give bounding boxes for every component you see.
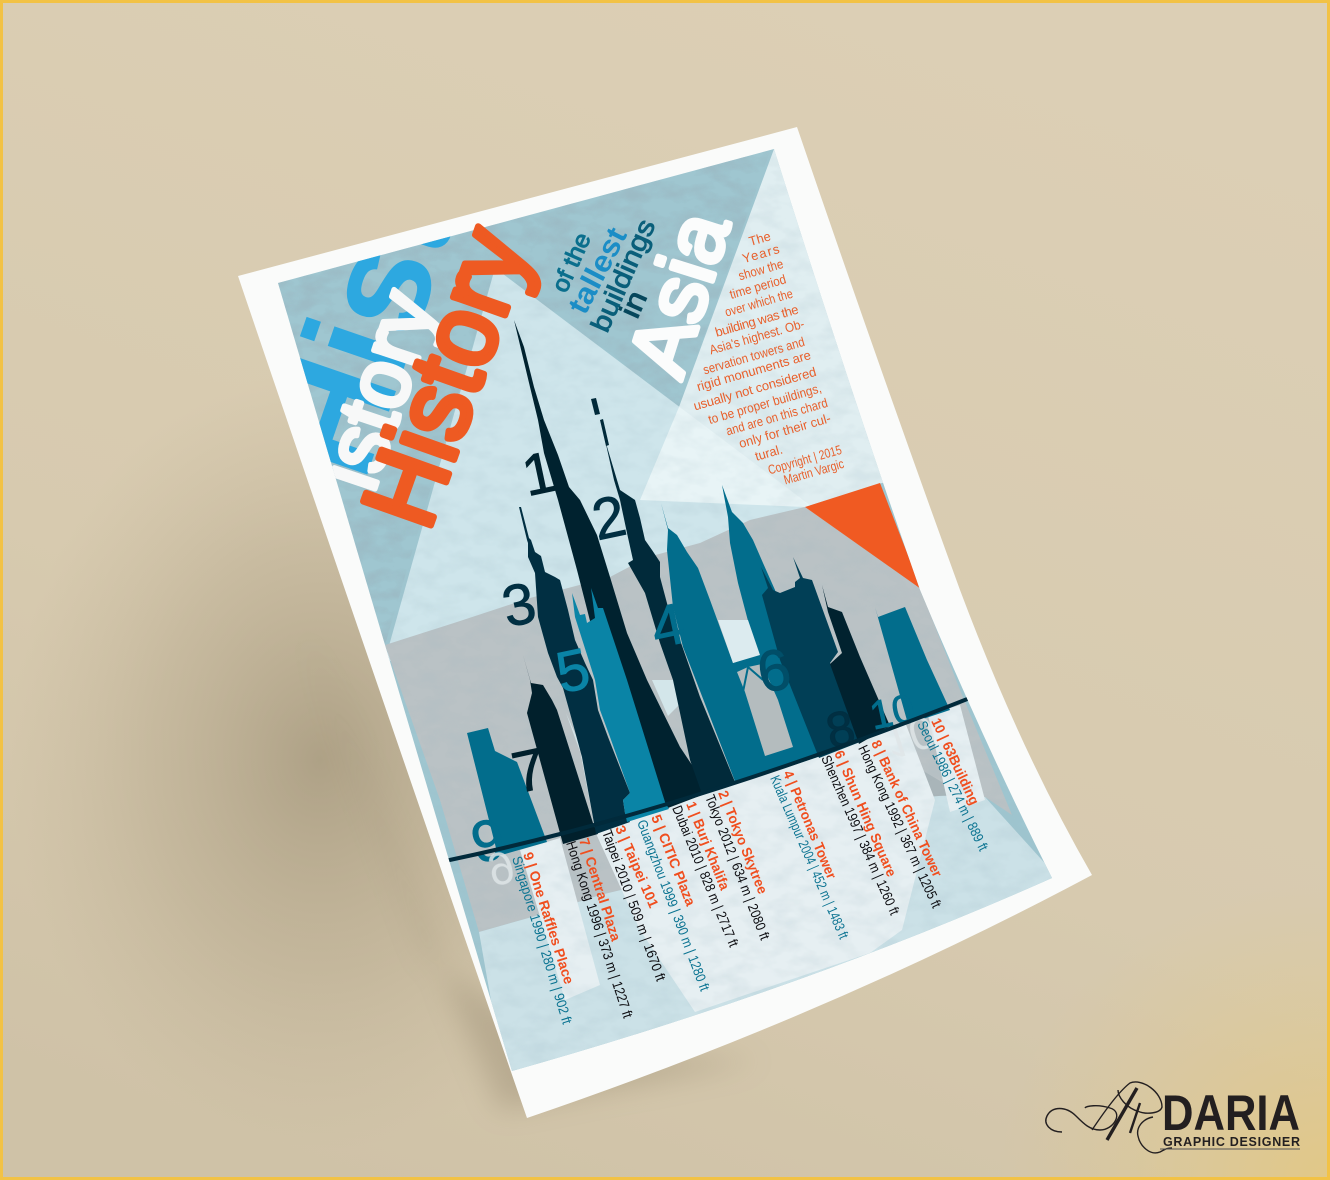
entry 9: Singapore 1990 | 280 m | 902 ft: [509, 854, 576, 1026]
entry 4: 4 | Petronas Tower: [780, 768, 840, 882]
subtitle: tallest: tallest: [562, 222, 634, 319]
ranking numbers: 9: [465, 806, 510, 876]
faded mirrored numbers: 10: [878, 705, 942, 770]
intro paragraph: servation towers and: [701, 334, 806, 377]
textured base: [260, 140, 1070, 1090]
logo swirl monogram: [1046, 1082, 1172, 1153]
ranking numbers: 8: [821, 699, 860, 760]
texture overlay: [539, 214, 970, 1006]
building 10: 63 Building: [875, 607, 950, 724]
intro paragraph: rigid monuments are: [695, 347, 813, 394]
entry 6: Shenzhen 1997 | 384 m | 1260 ft: [818, 753, 903, 917]
light triangle backdrop: [387, 274, 824, 661]
building list: [509, 715, 992, 1026]
subtitle: buildings: buildings: [585, 215, 661, 336]
entry 7: Hong Kong 1996 | 373 m | 1227 ft: [563, 839, 636, 1020]
orange History title: History: [340, 214, 552, 541]
paper drop shadow: [300, 620, 760, 1110]
building 3: Taipei 101: [519, 507, 630, 834]
ranking numbers: 2: [586, 483, 631, 553]
intro paragraph: over which the: [723, 286, 794, 320]
entry 1: 1 | Burj Khalifa: [683, 799, 733, 892]
ranking numbers: [472, 452, 907, 862]
building reflections: [520, 705, 985, 1012]
logo underline: [1160, 1148, 1300, 1150]
faded mirrored numbers: 9: [482, 840, 520, 897]
entry 2: Tokyo 2012 | 634 m | 2080 ft: [702, 792, 773, 942]
building 1: Burj Khalifa: [514, 320, 710, 808]
building 8: Bank of China Tower: [822, 585, 890, 744]
entry 1: Dubai 2010 | 828 m | 2717 ft: [669, 803, 742, 949]
subtitle: of the: of the: [547, 229, 597, 296]
building 4: Petronas Towers: [661, 485, 821, 784]
skyline: [467, 320, 950, 856]
orange triangle: [805, 483, 921, 589]
building 5: CITIC Plaza: [572, 588, 669, 822]
mottled texture on darker zones: [278, 157, 744, 642]
white title word: History: [281, 279, 455, 558]
poster artwork: [278, 149, 1052, 1071]
logo tagline: GRAPHIC DESIGNER: [1163, 1135, 1300, 1149]
entry 10: Seoul 1986 | 274 m | 889 ft: [914, 718, 992, 853]
lower pale-blue layer: [479, 795, 1060, 1080]
ranking numbers: 7: [506, 736, 551, 806]
entry 8: 8 | Bank of China Tower: [868, 738, 946, 880]
entry 3: 3 | Taipei 101: [612, 823, 662, 910]
intro paragraph: and are on this chard: [724, 395, 829, 438]
intro paragraph: [692, 228, 846, 487]
baseline rule: [445, 690, 990, 861]
entry 5: Guangzhou 1999 | 390 m | 1280 ft: [634, 817, 713, 993]
ranking numbers: 10: [866, 686, 919, 738]
intro paragraph: only for their cul-: [737, 410, 832, 451]
building 2: Tokyo Skytree: [591, 398, 735, 794]
intro paragraph: Years: [740, 241, 782, 266]
intro paragraph: usually not considered: [692, 364, 818, 413]
ranking numbers: 3: [496, 570, 541, 640]
ranking numbers: 6: [751, 636, 796, 706]
subtitle: in: in: [614, 286, 654, 323]
darker mountain peak: [924, 772, 946, 796]
intro paragraph: tural.: [753, 442, 784, 464]
intro paragraph: to be proper buildings,: [706, 380, 823, 427]
designer logo: [1046, 1082, 1300, 1153]
entry 4: [767, 768, 852, 941]
entry 7: 7 | Central Plaza: [576, 836, 624, 943]
ranking numbers: 5: [550, 636, 595, 706]
ranking numbers: 4: [645, 591, 690, 661]
entry 5: 5 | CITIC Plaza: [648, 812, 699, 908]
light sliver beside Taipei 101: [566, 714, 592, 813]
building 9: One Raffles Place: [467, 728, 547, 856]
intro paragraph: show the: [737, 256, 785, 283]
intro paragraph: building was the: [713, 302, 800, 340]
intro paragraph: The: [747, 228, 772, 249]
subtitle: Asia: Asia: [611, 201, 748, 386]
right text triangle: [640, 149, 905, 507]
logo name: DARIA: [1162, 1085, 1300, 1141]
poster sheet: [238, 127, 1092, 1118]
intro paragraph: Martin Vargic: [782, 456, 846, 487]
grey mountain layer: [385, 507, 1012, 932]
entry 9: 9 | One Raffles Place: [520, 850, 578, 986]
entry 2: 2 | Tokyo Skytree: [715, 788, 771, 896]
entry 6: 6 | Shun Hing Square: [831, 748, 900, 879]
intro paragraph: Asia's highest. Ob-: [708, 316, 806, 357]
faded mirrored numbers: [488, 718, 934, 885]
entry 8: Hong Kong 1992 | 367 m | 1205 ft: [855, 743, 945, 910]
intro paragraph: time period: [728, 271, 788, 302]
building 7: Central Plaza: [523, 655, 598, 844]
light gap between towers: [652, 680, 678, 716]
entry 10: 10 | 63Building: [928, 715, 983, 807]
entry 4: Kuala Lumpur 2004 | 452 m | 1483 ft: [767, 773, 852, 941]
ranking numbers: 1: [516, 439, 561, 509]
entry 3: Taipei 2010 | 509 m | 1670 ft: [599, 828, 669, 983]
intro paragraph: Copyright | 2015: [766, 442, 843, 477]
building 6: Shun Hing Square: [761, 557, 860, 758]
